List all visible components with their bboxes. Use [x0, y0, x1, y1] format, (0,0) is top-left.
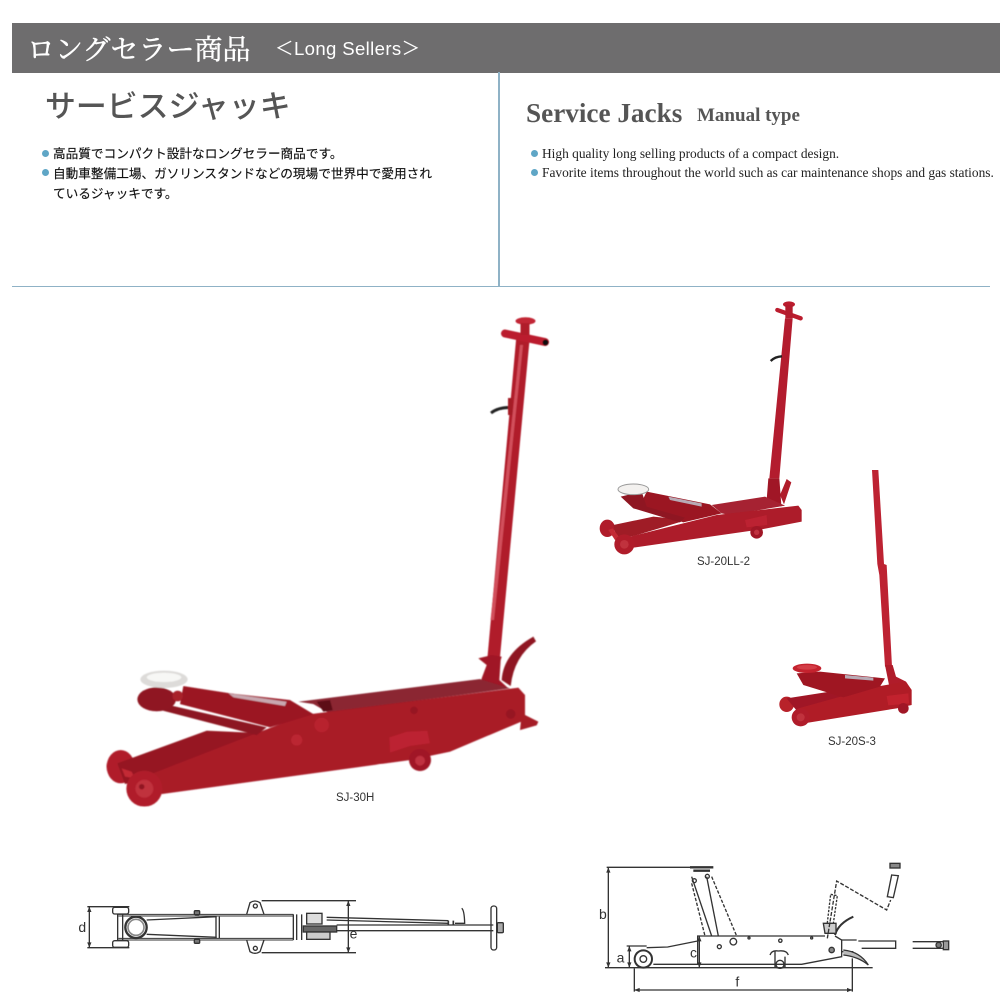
foot plate — [520, 713, 538, 730]
SJ-20LL-2 frame — [630, 506, 802, 548]
dimension c — [690, 936, 699, 968]
diagram: top view — [78, 901, 503, 953]
rear wheel — [107, 750, 135, 783]
caption SJ-20S-3: SJ-20S-3 — [828, 736, 876, 748]
caption SJ-30H: SJ-30H — [336, 792, 374, 804]
top plate — [298, 679, 510, 713]
Japanese bullet text 2: 自動車整備工場、ガソリンスタンドなどの現場で世界中で愛用され — [53, 163, 432, 182]
front wheel — [126, 771, 162, 807]
SJ-20S-3 frame — [798, 682, 912, 724]
dimension a: a — [617, 950, 625, 966]
bolts — [314, 718, 329, 732]
SJ-20LL-2 top plate — [712, 497, 785, 515]
SJ-20LL-2 lift arm — [640, 492, 722, 522]
dimension f — [634, 958, 852, 992]
photo: SJ-20S-3 jack — [779, 470, 912, 726]
diagram: side view — [599, 863, 949, 992]
caption SJ-20LL-2: SJ-20LL-2 — [697, 556, 750, 568]
SJ-20LL-2 handle — [769, 318, 793, 478]
Japanese bullet list — [42, 143, 432, 202]
handle — [327, 906, 503, 950]
saddle — [140, 671, 188, 688]
SJ-30H handle — [488, 317, 548, 657]
header title: ロングセラー商品 — [27, 28, 250, 68]
SJ-20S-3 handle — [872, 470, 892, 667]
dimension b: b — [599, 906, 607, 922]
socket — [478, 655, 508, 689]
dimension d — [78, 907, 129, 948]
SJ-20S-3 lift arm — [797, 672, 885, 697]
English subheading: Manual type — [697, 105, 800, 126]
SJ-20S-3 socket — [885, 665, 912, 690]
Japanese heading: サービスジャッキ — [45, 81, 291, 126]
jack frame — [113, 901, 337, 953]
base line — [605, 966, 873, 970]
photo: SJ-30H jack — [107, 317, 548, 807]
bullet 1 — [42, 150, 49, 157]
header band — [12, 23, 1000, 72]
Japanese bullet text 2: ているジャッキです。 — [53, 182, 178, 202]
dimension e — [262, 901, 358, 953]
vertical divider — [498, 72, 500, 287]
dimension d: d — [78, 919, 86, 935]
dimension a — [617, 946, 647, 968]
SJ-20LL-2 saddle — [618, 484, 649, 495]
horizontal divider — [12, 286, 990, 287]
photo: SJ-20LL-2 jack — [600, 301, 802, 554]
bullet 2 — [42, 169, 49, 176]
side frame — [148, 688, 525, 794]
lift arm — [180, 686, 313, 727]
caster — [409, 749, 431, 771]
dimension c: c — [690, 945, 697, 961]
dimension e: e — [350, 926, 358, 942]
pedal — [502, 637, 536, 686]
dimension f: f — [735, 973, 739, 989]
bullet 1 — [531, 150, 538, 157]
handle swing positions — [823, 863, 900, 938]
bullet 2 — [531, 169, 538, 176]
English heading: Service Jacks — [526, 98, 682, 128]
SJ-30H body — [107, 637, 538, 807]
jack outline — [635, 867, 949, 968]
header subtitle: ＜Long Sellers＞ — [275, 38, 420, 58]
Japanese bullet text 2 — [53, 163, 432, 202]
axle — [122, 768, 135, 778]
English bullet list — [531, 146, 994, 180]
lower arm — [117, 731, 267, 784]
English bullet text 2: Favorite items throughout the world such as car maintenance shops and gas stations. — [542, 165, 994, 180]
SJ-20S-3 saddle — [793, 664, 821, 673]
SJ-20LL-2 pedal — [780, 479, 791, 504]
dimension b — [599, 867, 691, 968]
Japanese bullet text 1: 高品質でコンパクト設計なロングセラー商品です。 — [53, 143, 342, 162]
English bullet text 1: High quality long selling products of a compact design. — [542, 146, 839, 161]
